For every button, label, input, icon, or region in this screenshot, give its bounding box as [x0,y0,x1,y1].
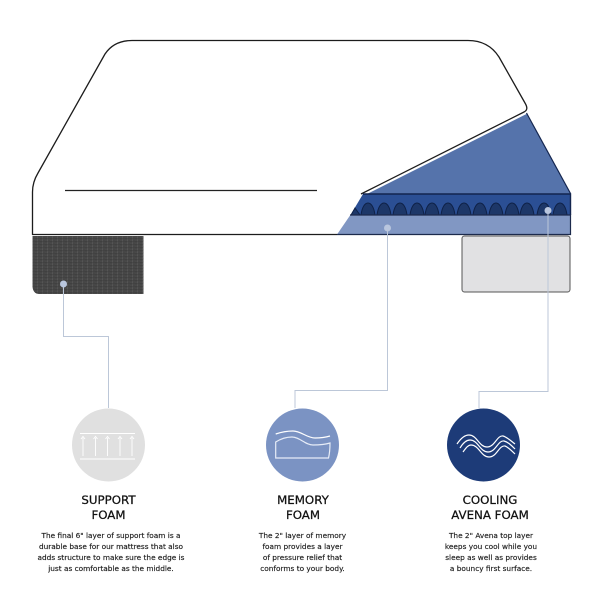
cooling avena foam band [350,194,570,215]
text: support foam description: durable base for our mattress that also [39,542,184,551]
text: support foam description: The final 6" layer of support foam is a [40,531,181,540]
heading: support foam: SUPPORT [81,493,136,507]
cover seam line [65,190,317,192]
connector: memory foam [295,224,391,408]
text: support foam description: just as comfortable as the middle. [47,564,174,573]
icon: cooling foam [447,408,520,482]
text: cooling foam description: sleep as well as provides [445,553,537,562]
icon: memory foam [266,408,339,482]
avena foam bumps [351,203,567,215]
memory foam layer [337,216,570,234]
upper blue foam wedge [368,114,570,194]
heading: cooling avena foam: COOLING [463,493,517,507]
text: support foam description: adds structure to make sure the edge is [38,553,185,562]
heading: memory foam: MEMORY [277,493,330,507]
support foam side block [462,236,570,292]
text: cooling foam description: keeps you cool while you [445,542,537,551]
heading: cooling avena foam: AVENA FOAM [451,508,529,522]
heading: support foam: FOAM [91,508,126,522]
connector: support foam [60,280,108,408]
text: cooling foam description: The 2" Avena top layer [448,531,534,540]
mattress cover outline [32,40,527,234]
heading: memory foam: FOAM [286,508,320,522]
text: memory foam description: conforms to your body. [260,564,345,573]
text: memory foam description: of pressure relief that [263,553,342,562]
mattress foam cutaway [337,113,570,234]
text: memory foam description: foam provides a layer [262,542,344,551]
text: memory foam description: The 2" layer of memory [258,531,347,540]
connector: cooling foam [479,207,552,408]
support foam swatch [32,236,144,294]
icon: support foam [72,408,145,482]
text: cooling foam description: a bouncy first surface. [450,564,532,573]
